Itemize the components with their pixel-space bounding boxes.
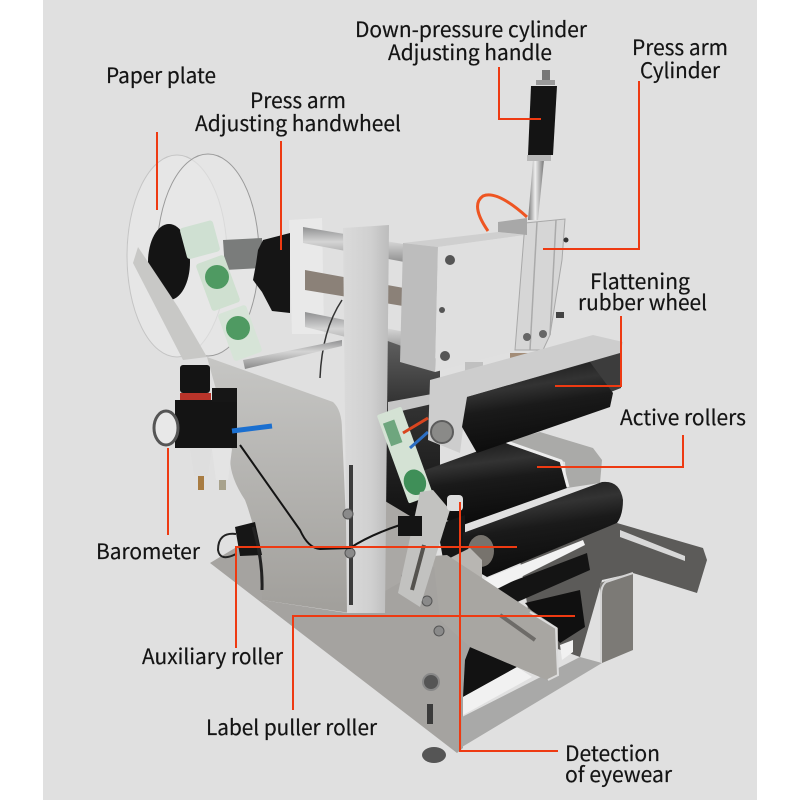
sensor cable bbox=[240, 445, 400, 549]
coloured air tubes bbox=[403, 418, 428, 448]
dark gap under sensor bbox=[437, 515, 465, 570]
roller bracket bbox=[450, 548, 482, 590]
label: auxiliary roller: Auxiliary roller bbox=[142, 641, 284, 671]
column slot bbox=[349, 465, 353, 605]
rear cross rod bbox=[388, 394, 432, 414]
reel support arm bbox=[133, 247, 207, 360]
reel hub bbox=[148, 224, 190, 300]
leader: detection bbox=[460, 502, 558, 751]
labeling machine illustration bbox=[127, 70, 707, 763]
guide rods bbox=[303, 227, 415, 354]
rear bracket plate bbox=[289, 218, 324, 334]
label: press arm cylinder bbox=[632, 32, 728, 85]
sensor barrel bbox=[447, 495, 463, 511]
press arm post bbox=[465, 362, 483, 374]
third roller bbox=[495, 553, 590, 603]
label: paper plate: Paper plate bbox=[106, 60, 216, 90]
main side plate bbox=[207, 357, 350, 613]
down-pressure handle bbox=[527, 70, 557, 161]
label: down-pressure cylinder adjusting handle: Down-pressure cylinder bbox=[355, 14, 588, 44]
vertical rod bbox=[528, 160, 544, 220]
rear dark assembly bbox=[385, 340, 440, 520]
label: press arm cylinder: Cylinder bbox=[640, 55, 721, 85]
leader: handwheel bbox=[280, 141, 282, 250]
flattening arm bbox=[428, 335, 623, 453]
arm end shadow bbox=[467, 353, 621, 400]
reel shaft bbox=[223, 238, 262, 270]
label opening bbox=[463, 647, 517, 697]
roller bearing bbox=[468, 535, 494, 567]
rear left wheel bbox=[218, 522, 262, 590]
air regulator bbox=[175, 365, 237, 490]
label: detection of eyewear: Detection bbox=[565, 738, 660, 768]
white strips bbox=[463, 540, 585, 715]
label: flattening rubber wheel: Flattening bbox=[590, 266, 690, 296]
label: press arm cylinder: Press arm bbox=[632, 32, 728, 62]
label: barometer: Barometer bbox=[96, 536, 201, 566]
leader: auxiliary roller bbox=[236, 547, 517, 648]
bracket slot bbox=[412, 545, 424, 590]
leader: cylinder bbox=[543, 81, 639, 249]
label: active rollers: Active rollers bbox=[620, 402, 746, 432]
bearing on base plate bbox=[423, 674, 439, 690]
upright column bbox=[343, 225, 389, 613]
sensor bracket bbox=[398, 490, 450, 607]
right dark frame and slotted arm bbox=[462, 523, 707, 747]
roller cover plate bbox=[505, 432, 602, 488]
upper rail rod bbox=[243, 340, 342, 369]
leader: active rollers bbox=[537, 435, 683, 467]
label: detection of eyewear: of eyewear bbox=[565, 759, 673, 789]
cover edge highlight bbox=[507, 442, 568, 487]
leader: paper plate bbox=[156, 132, 158, 210]
slot bbox=[500, 615, 535, 640]
paper plate discs bbox=[127, 154, 259, 357]
label puller roller bbox=[463, 482, 623, 577]
sensor head bbox=[398, 516, 422, 536]
label: detection of eyewear bbox=[565, 738, 673, 789]
label strip by column bbox=[377, 406, 433, 504]
flattening rubber wheel bbox=[462, 362, 613, 453]
leader: handle bbox=[499, 67, 541, 119]
barometer gauge bbox=[154, 411, 178, 445]
label: press arm adjusting handwheel bbox=[195, 85, 401, 138]
lower roller bbox=[525, 590, 585, 643]
mounting tab bbox=[510, 353, 543, 362]
air hose bbox=[478, 195, 527, 231]
leader: label puller roller bbox=[293, 616, 575, 710]
blue air tube bbox=[232, 426, 272, 431]
label: press arm adjusting handwheel: Press arm bbox=[250, 85, 346, 115]
base slot bbox=[427, 704, 433, 724]
press arm cylinder body bbox=[515, 219, 568, 350]
lower plate right of column bbox=[380, 498, 447, 640]
wire behind column bbox=[320, 300, 342, 378]
leader lines bbox=[157, 67, 683, 751]
arm end highlight bbox=[530, 612, 558, 680]
base plate bbox=[210, 548, 558, 753]
foot bbox=[422, 747, 446, 763]
label: label puller roller: Label puller roller bbox=[206, 712, 378, 742]
press arm block bbox=[400, 232, 525, 372]
active roller bbox=[403, 442, 567, 525]
leader: flattening wheel bbox=[555, 316, 621, 386]
flattening arm bearing bbox=[431, 421, 453, 443]
label: down-pressure cylinder adjusting handle: Adjusting handle bbox=[388, 37, 552, 67]
front slotted arm bbox=[433, 555, 558, 680]
label: flattening rubber wheel: rubber wheel bbox=[578, 287, 707, 317]
cylinder top block bbox=[498, 218, 527, 235]
column bolts bbox=[343, 509, 444, 636]
label: flattening rubber wheel bbox=[578, 266, 707, 317]
press arm adjusting handwheel bbox=[253, 233, 290, 313]
label strip on reel bbox=[179, 220, 263, 362]
leader: barometer bbox=[167, 448, 169, 535]
label: press arm adjusting handwheel: Adjusting handwheel bbox=[195, 108, 401, 138]
label: down-pressure cylinder adjusting handle bbox=[355, 14, 588, 67]
